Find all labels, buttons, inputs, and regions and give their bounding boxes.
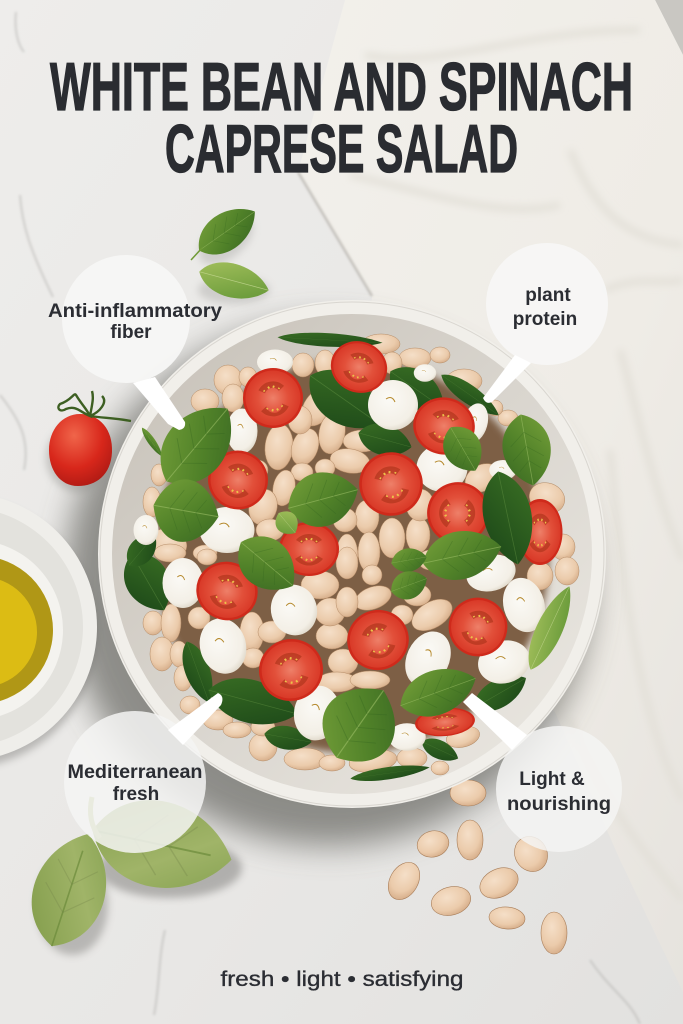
title (50, 49, 633, 187)
dark spinach leaves (113, 330, 533, 785)
basil leaves on salad (143, 389, 581, 779)
callout: anti-inflammatory fiber (48, 255, 222, 430)
callout: light and nourishing: Light & (519, 769, 585, 790)
callout: mediterranean fresh: Mediterranean (68, 762, 202, 783)
callout: mediterranean fresh: fresh (113, 784, 159, 805)
footer tagline: fresh • light • satisfying (220, 968, 464, 991)
bowl shadow (64, 322, 592, 846)
callout: anti-inflammatory fiber: fiber (110, 322, 152, 343)
mozzarella balls (134, 350, 551, 751)
callout: plant protein (483, 243, 608, 403)
olive oil dish (0, 493, 97, 768)
white bowl (98, 300, 606, 808)
basil leaves top (189, 196, 273, 307)
callout: mediterranean fresh (64, 693, 222, 853)
callout: anti-inflammatory fiber: Anti-inflammatory (48, 301, 222, 322)
tomato halves (188, 333, 562, 739)
callout: light and nourishing: nourishing (507, 794, 611, 815)
callout: light and nourishing (463, 693, 622, 852)
callout: plant protein: protein (513, 309, 577, 330)
salad food (113, 330, 581, 785)
loose white beans (382, 780, 567, 954)
linen cloth (298, 0, 683, 992)
cherry tomato (46, 391, 131, 492)
basil leaves bottom left (18, 788, 242, 957)
callout: plant protein: plant (525, 285, 571, 306)
white beans in bowl (143, 334, 579, 775)
